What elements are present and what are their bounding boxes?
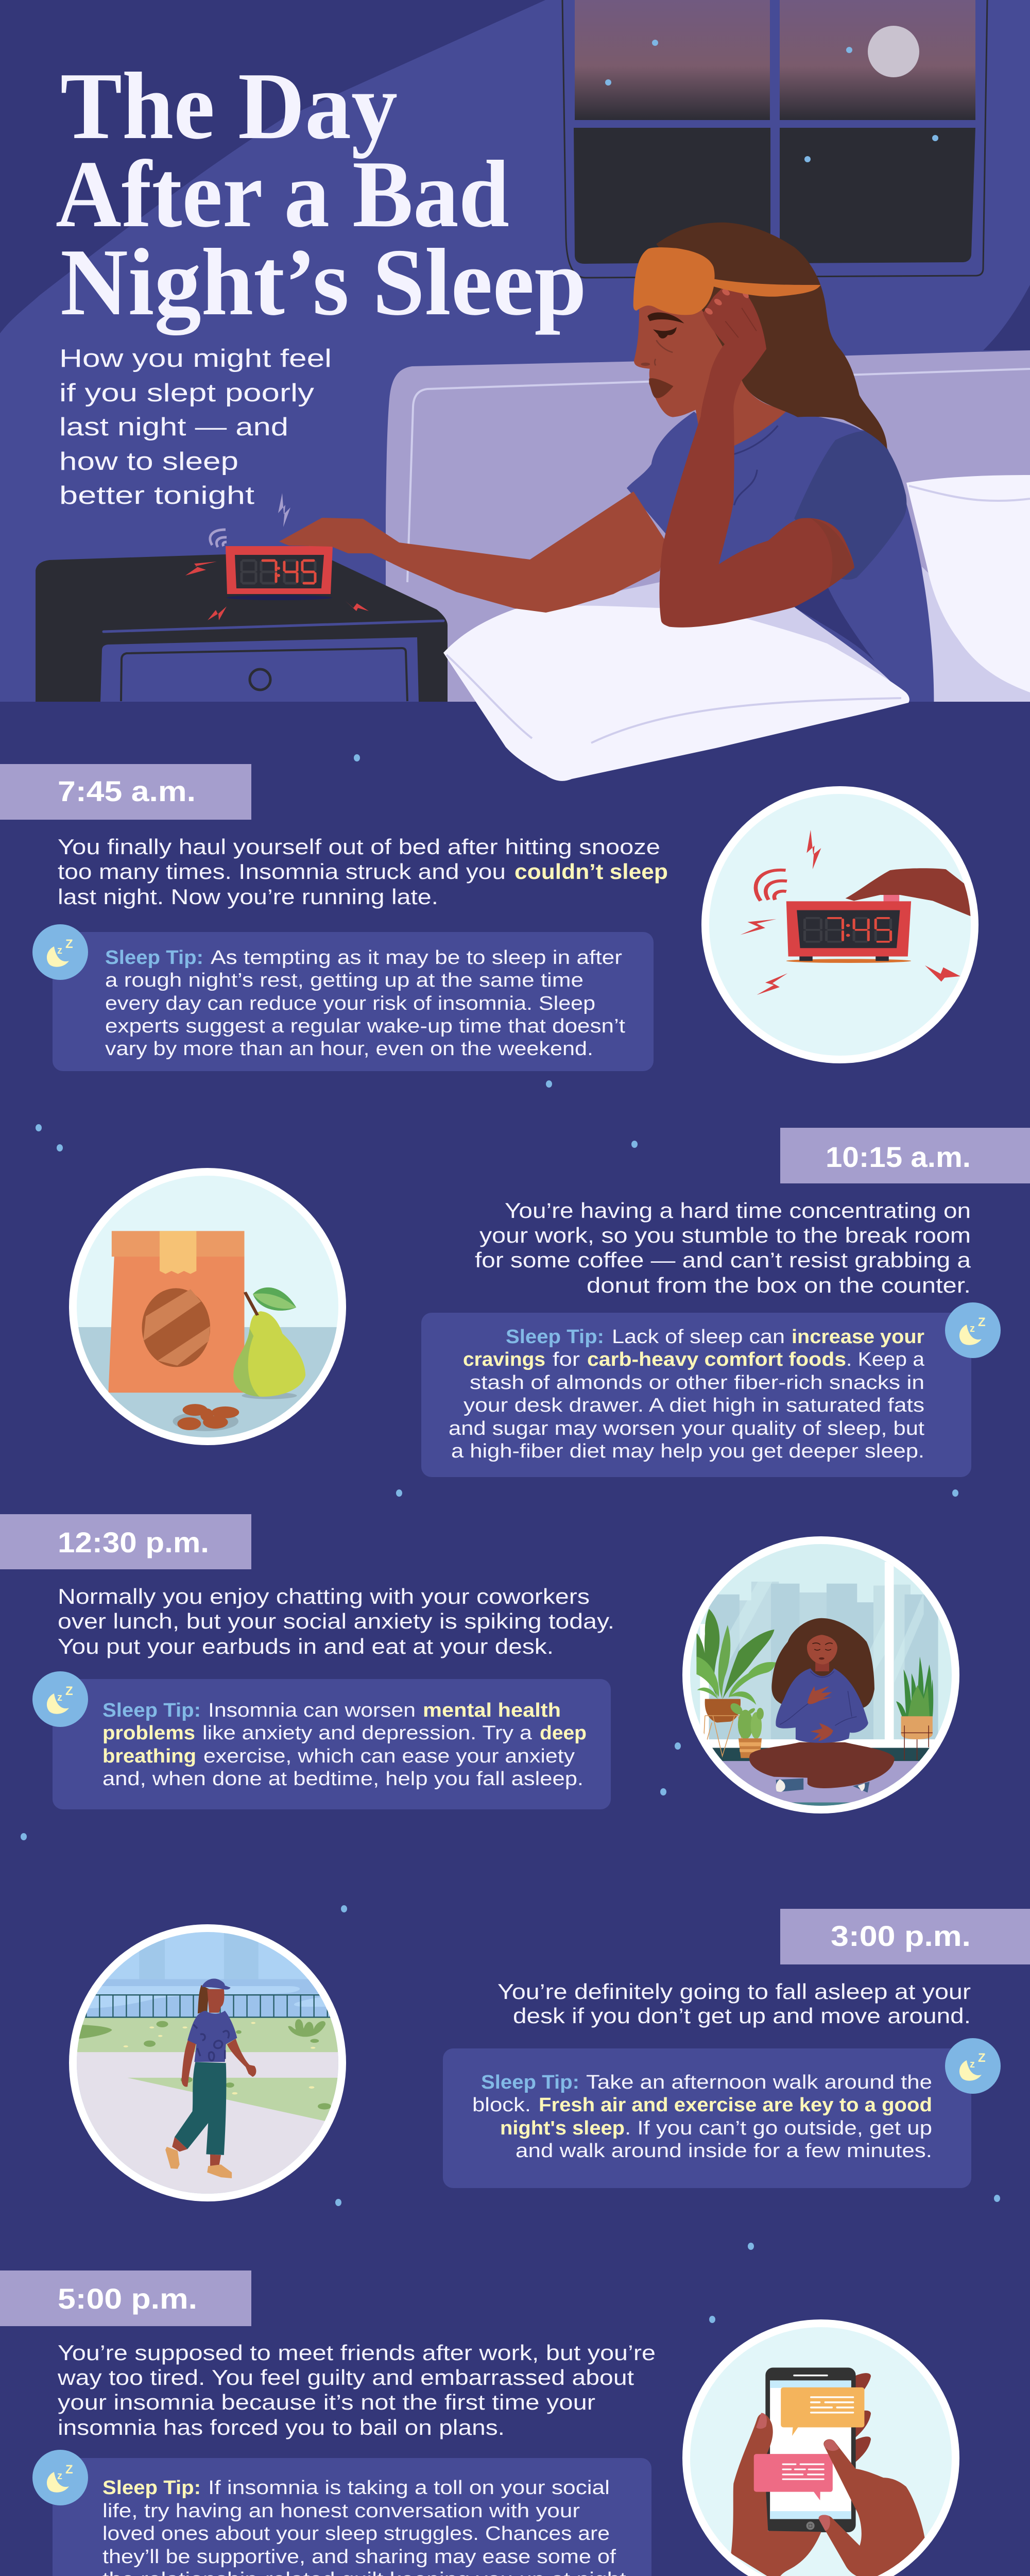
sleep tip box: a high-fiber diet may help you get deeper sleep. — [451, 1440, 924, 1462]
sleep tip box: Sleep Tip: — [481, 2072, 579, 2093]
sleep tip box: a rough night’s rest, getting up at the same time — [105, 970, 583, 991]
torso and shirt — [627, 410, 934, 702]
illustration: woman breathing with plants — [682, 1536, 965, 1820]
phone — [765, 2368, 856, 2532]
stars scattered over the page — [21, 754, 1000, 2576]
sleep tip box: Fresh air and exercise are key to a good — [539, 2094, 932, 2116]
sleep tip box: stash of almonds or other fiber-rich snacks in — [470, 1372, 924, 1394]
bedroom window — [562, 0, 987, 278]
sleep tip box: carb-heavy comfort foods — [587, 1349, 846, 1370]
illustration: woman walking outside — [69, 1924, 347, 2210]
sleep tip box: Sleep Tip: — [506, 1326, 604, 1348]
nightstand — [36, 554, 448, 702]
subtitle — [59, 345, 332, 510]
sleep tip box: problems — [102, 1722, 195, 1744]
icon: moon badge: Z — [65, 1684, 73, 1698]
body text: Normally you enjoy chatting with your coworkers — [58, 1584, 590, 1608]
title: Night’s Sleep — [60, 229, 587, 335]
neck and face — [634, 289, 788, 446]
sleep tip box — [53, 2458, 651, 2576]
subtitle: better tonight — [59, 482, 254, 510]
sleep tip box: breathing — [102, 1745, 196, 1767]
body text: insomnia has forced you to bail on plans. — [58, 2415, 505, 2439]
raised arm and hand — [659, 289, 854, 628]
subtitle: how to sleep — [59, 448, 238, 476]
potted plant left — [696, 1609, 776, 1756]
time tag: 7:45 a.m. — [58, 775, 196, 807]
back pillow — [906, 475, 1030, 702]
panel: 7:45 a.m. — [0, 764, 978, 1071]
time tag: 12:30 p.m. — [58, 1526, 209, 1558]
time tag — [0, 1514, 251, 1569]
snake plant — [896, 1656, 933, 1760]
sleep tip box: like anxiety and depression. Try a — [202, 1722, 533, 1744]
right hand — [819, 2439, 925, 2576]
body text: your insomnia because it’s not the first time your — [58, 2390, 595, 2414]
icon: moon badge: z — [970, 1323, 975, 1334]
title: The Day — [60, 53, 398, 159]
subtitle: if you slept poorly — [59, 379, 315, 407]
body text: desk if you don’t get up and move around. — [513, 2004, 971, 2028]
body text — [58, 835, 668, 909]
body text — [497, 1979, 971, 2028]
icon: moon badge — [32, 2450, 88, 2505]
woman sitting up in bed — [627, 410, 934, 702]
sleep tip box: mental health — [423, 1700, 561, 1721]
time tag — [780, 1909, 1030, 1964]
body text: your work, so you stumble to the break room — [479, 1223, 971, 1247]
sleep tip box: Insomnia can worsen — [208, 1700, 416, 1721]
panel: 5:00 p.m. — [0, 2270, 959, 2576]
cactus — [728, 1701, 764, 1758]
sleep tip box: experts suggest a regular wake-up time that doesn’t — [105, 1015, 626, 1037]
title: After a Bad — [56, 141, 509, 247]
sleep tip box: Sleep Tip: — [102, 2477, 201, 2499]
city skyline — [709, 1582, 938, 1740]
alarm clock — [185, 493, 369, 620]
body text: You’re having a hard time concentrating on — [505, 1198, 971, 1223]
icon: moon badge: Z — [978, 2051, 986, 2065]
sleep tip box: life, try having an honest conversation with your — [102, 2500, 580, 2522]
sleep tip box: cravings — [463, 1349, 545, 1370]
icon: moon badge — [945, 1302, 1001, 1358]
walking woman — [165, 1978, 256, 2178]
icon: moon badge: Z — [65, 937, 73, 951]
body text: couldn’t sleep — [514, 859, 668, 884]
sleep tip box — [53, 932, 654, 1071]
icon: moon badge — [32, 1671, 88, 1727]
time tag: 3:00 p.m. — [831, 1920, 971, 1952]
body text: way too tired. You feel guilty and embarrassed about — [57, 2365, 634, 2389]
icon: moon badge — [32, 924, 88, 980]
body text: You put your earbuds in and eat at your desk. — [58, 1634, 554, 1658]
park background — [71, 1932, 347, 2210]
time tag — [0, 764, 251, 820]
icon: moon badge: Z — [65, 2463, 73, 2477]
sleep mask — [633, 247, 820, 315]
sleep tip box — [421, 1313, 971, 1477]
panel: 12:30 p.m. — [0, 1514, 965, 1820]
pink message bubble — [754, 2454, 833, 2500]
icon: moon badge — [945, 2038, 1001, 2094]
header illustration — [0, 0, 1030, 703]
bed sheet shadow — [515, 582, 908, 703]
alarm bolts — [185, 493, 369, 620]
body text — [58, 1584, 614, 1658]
floor band under header — [0, 702, 1030, 733]
body text: You finally haul yourself out of bed after hitting snooze — [58, 835, 660, 859]
icon: moon badge: z — [57, 2470, 62, 2482]
icon: moon badge: Z — [978, 1315, 986, 1329]
time tag: 10:15 a.m. — [826, 1141, 971, 1173]
sleep tip box: and, when done at bedtime, help you fall asleep. — [102, 1768, 583, 1790]
headboard — [386, 350, 1030, 702]
woman's arms, head and sleep mask — [279, 223, 887, 628]
subtitle: last night — and — [59, 413, 288, 441]
sleep tip box: vary by more than an hour, even on the weekend. — [105, 1038, 593, 1060]
body text: You’re supposed to meet friends after work, but you’re — [58, 2341, 656, 2365]
sleep tip box: for — [553, 1349, 580, 1370]
sleep tip box: deep — [540, 1722, 587, 1744]
sleep tip box: Lack of sleep can — [612, 1326, 785, 1348]
body text: donut from the box on the counter. — [587, 1273, 971, 1297]
sleep tip box: and sugar may worsen your quality of sleep, but — [449, 1418, 925, 1439]
sleep tip box: and walk around inside for a few minutes. — [516, 2140, 932, 2162]
sleep tip box: As tempting as it may be to sleep in after — [211, 947, 622, 969]
sleep tip box — [53, 1679, 611, 1809]
sleep tip box: night's sleep — [500, 2117, 625, 2139]
icon: moon badge: z — [57, 945, 62, 956]
back fingers — [826, 2373, 871, 2484]
front pillow — [443, 606, 909, 781]
body text — [475, 1198, 971, 1297]
sleep tip box: exercise, which can ease your anxiety — [203, 1745, 575, 1767]
sleep tip box: block. — [472, 2094, 531, 2116]
sleep tip box: Sleep Tip: — [105, 947, 203, 969]
illustration: coffee bag, pear and almonds — [66, 1168, 355, 1446]
woman meditating — [749, 1618, 895, 1792]
sleep tip box — [443, 2048, 971, 2188]
body text: too many times. Insomnia struck and you — [58, 859, 506, 884]
orange message bubble — [781, 2387, 864, 2436]
sleep tip box: increase your — [792, 1326, 924, 1348]
sleep tip box: loved ones about your sleep struggles. Chances are — [102, 2523, 610, 2545]
body text — [57, 2341, 656, 2439]
left hand — [731, 2414, 821, 2576]
subtitle: How you might feel — [59, 345, 332, 372]
body text: for some coffee — and can’t resist grabbing a — [475, 1248, 971, 1272]
illustration: alarm clock — [701, 786, 978, 1063]
body text: last night. Now you’re running late. — [58, 885, 438, 909]
sleep tip box: your desk drawer. A diet high in saturated fats — [464, 1395, 924, 1416]
long hair — [656, 223, 887, 449]
sleep tip box: If insomnia is taking a toll on your social — [208, 2477, 610, 2499]
panel: 3:00 p.m. — [69, 1909, 1030, 2210]
reaching arm — [279, 492, 666, 613]
sleep tip box: . Keep a — [846, 1349, 925, 1370]
icon: moon badge: z — [57, 1692, 62, 1703]
body text: You’re definitely going to fall asleep at your — [497, 1979, 971, 2004]
time tag — [780, 1128, 1030, 1183]
facial features — [647, 312, 684, 324]
sleep tip box: they’ll be supportive, and sharing may ease some of — [102, 2546, 616, 2568]
panel: 10:15 a.m. — [66, 1128, 1030, 1477]
sleep tip box: Sleep Tip: — [102, 1700, 201, 1721]
illustration: hands holding phone — [682, 2319, 959, 2576]
icon: moon badge: z — [970, 2059, 975, 2070]
title — [56, 53, 587, 335]
body text: over lunch, but your social anxiety is spiking today. — [58, 1609, 614, 1633]
sleep tip box: every day can reduce your risk of insomnia. Sleep — [105, 993, 595, 1014]
sleep tip box: . If you can’t go outside, get up — [625, 2117, 932, 2139]
time tag: 5:00 p.m. — [58, 2282, 197, 2315]
sleep tip box: Take an afternoon walk around the — [586, 2072, 932, 2093]
time tag — [0, 2270, 251, 2326]
